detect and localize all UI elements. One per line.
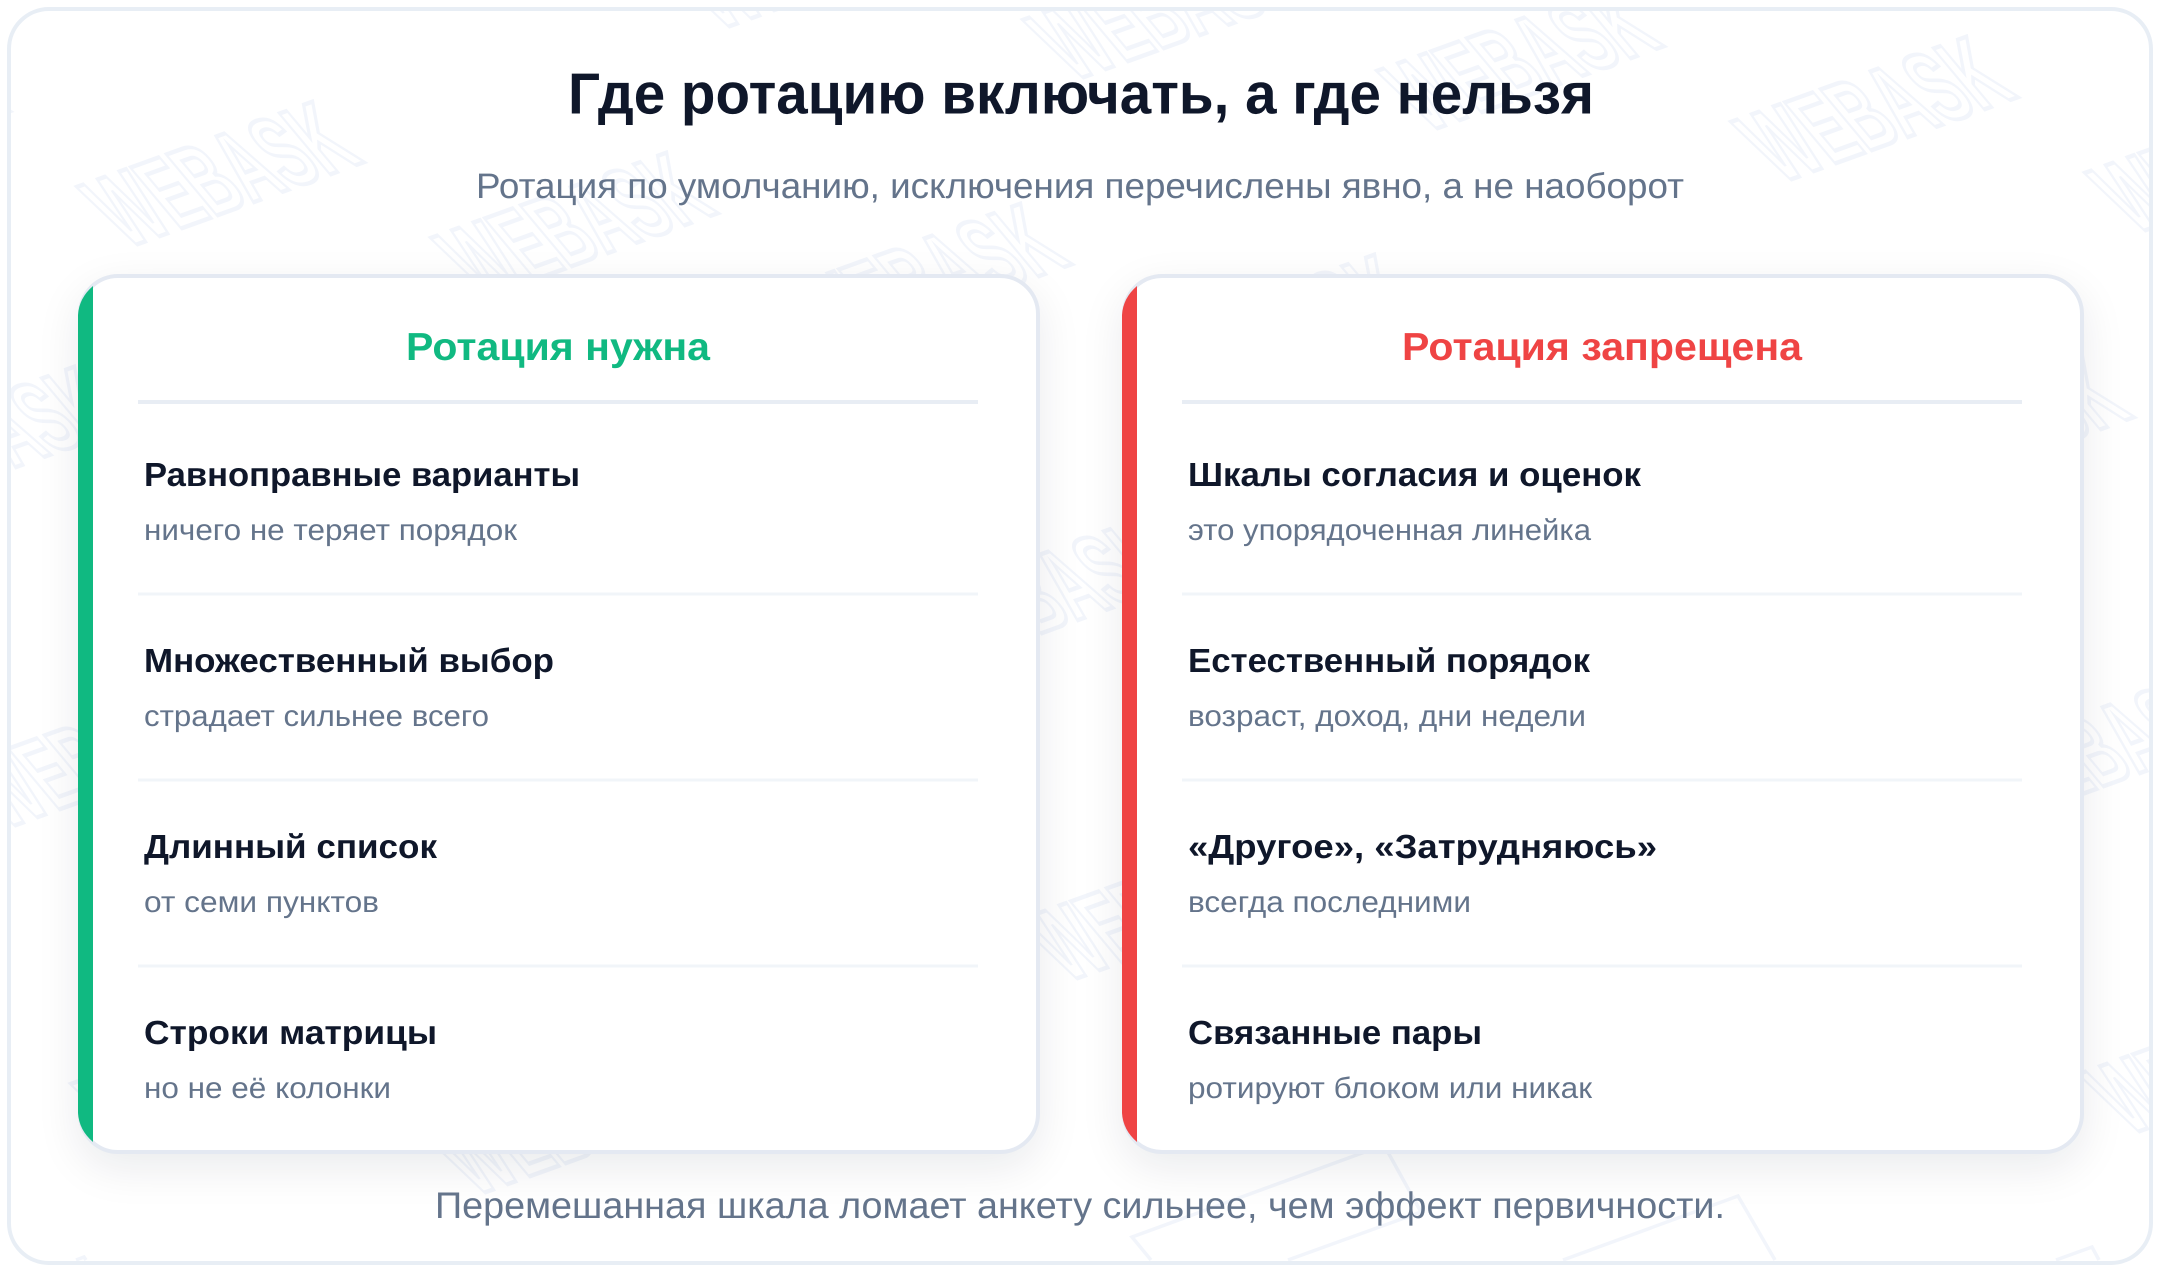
background watermark pattern: WEBASK <box>646 765 967 950</box>
background watermark pattern: WEBASK <box>1714 17 2035 202</box>
row: natural order: Естественный порядок <box>1188 643 1590 680</box>
row: multiple choice: Множественный выбор <box>144 643 554 680</box>
background watermark pattern: WEBASK <box>1000 816 1321 1001</box>
row: agreement scales: это упорядоченная линейка <box>1188 514 1592 547</box>
background watermark pattern: WEBASK <box>1592 602 1913 787</box>
background watermark pattern: WEBASK <box>1476 286 1797 471</box>
background watermark pattern: WEBASK <box>1708 918 2029 1103</box>
background watermark pattern: WEBASK <box>1354 867 1675 1052</box>
row: matrix rows <box>144 1015 437 1105</box>
background watermark pattern: WEBASK <box>530 449 851 634</box>
row: long list <box>144 829 437 919</box>
background watermark pattern: WEBASK <box>884 500 1205 685</box>
background watermark pattern: WEBASK <box>292 714 613 899</box>
background watermark pattern: WEBASK <box>60 82 381 267</box>
row: linked pairs: ротируют блоком или никак <box>1188 1072 1593 1105</box>
panel heading: rotation needed: Ротация нужна <box>406 326 710 369</box>
panel: rotation needed <box>78 274 1040 1154</box>
row: linked pairs <box>1188 1015 1593 1105</box>
subtitle: Ротация по умолчанию, исключения перечислены явно, а не наоборот <box>476 166 1684 206</box>
row: natural order <box>1188 643 1590 733</box>
background watermark pattern: WEBASK <box>414 133 735 318</box>
row: agreement scales: Шкалы согласия и оценок <box>1188 457 1641 494</box>
footer note: Перемешанная шкала ломает анкету сильнее, чем эффект первичности. <box>435 1185 1725 1226</box>
background watermark pattern: WEBASK <box>54 979 375 1164</box>
row: agreement scales <box>1188 457 1641 547</box>
row: other and hard to say: «Другое», «Затрудняюсь» <box>1188 829 1657 866</box>
panel: rotation forbidden <box>1122 274 2084 1154</box>
panel heading: rotation forbidden: Ротация запрещена <box>1402 326 1802 369</box>
background watermark pattern: WEBASK <box>768 184 1089 369</box>
background watermark pattern: WEBASK <box>1122 235 1443 420</box>
background watermark pattern: WEBASK <box>408 1030 729 1215</box>
row: equal options: ничего не теряет порядок <box>144 514 518 547</box>
row: matrix rows: Строки матрицы <box>144 1015 437 1052</box>
green accent bar <box>78 286 93 1142</box>
row: matrix rows: но не её колонки <box>144 1072 391 1105</box>
background watermark pattern: WEBASK <box>176 398 497 583</box>
row: other and hard to say: всегда последними <box>1188 886 1471 919</box>
row: other and hard to say <box>1188 829 1657 919</box>
red accent bar <box>1122 286 1137 1142</box>
background watermark pattern: WEBASK <box>1238 551 1559 736</box>
row: long list: от семи пунктов <box>144 886 379 919</box>
row: natural order: возраст, доход, дни недели <box>1188 700 1586 733</box>
row: equal options: Равноправные варианты <box>144 457 580 494</box>
row: multiple choice: страдает сильнее всего <box>144 700 489 733</box>
title: Где ротацию включать, а где нельзя <box>568 62 1594 126</box>
row: multiple choice <box>144 643 554 733</box>
row: linked pairs: Связанные пары <box>1188 1015 1482 1052</box>
row: long list: Длинный список <box>144 829 437 866</box>
background watermark pattern: WEBASK <box>1830 337 2151 522</box>
row: equal options <box>144 457 580 547</box>
